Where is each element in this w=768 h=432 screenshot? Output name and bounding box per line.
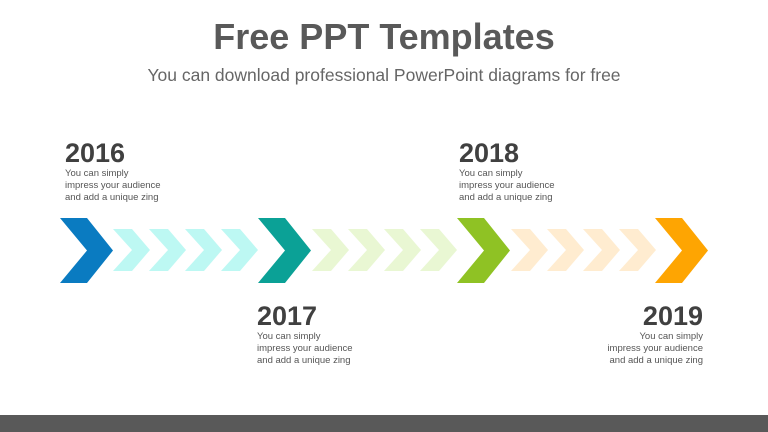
text: 2018: and add a unique zing (459, 192, 552, 203)
text: 2019: impress your audience (607, 343, 703, 354)
small chevrons light orange (511, 229, 656, 271)
subtitle: You can download professional PowerPoint diagrams for free (147, 65, 621, 85)
text: 2016 (65, 138, 161, 203)
footer bar (0, 415, 768, 432)
small chevrons light green (312, 229, 457, 271)
text: 2016: 2016 (65, 138, 125, 168)
text: 2019: and add a unique zing (610, 355, 703, 366)
text: 2017: and add a unique zing (257, 355, 350, 366)
small chevrons cyan (113, 229, 258, 271)
text: 2018 (459, 138, 555, 203)
chevron 2018 (457, 218, 510, 283)
title: Free PPT Templates (213, 16, 555, 57)
text: 2017 (257, 301, 353, 366)
text: 2019: You can simply (639, 331, 703, 342)
text: 2017: impress your audience (257, 343, 353, 354)
text: 2016: impress your audience (65, 180, 161, 191)
text: 2017: 2017 (257, 301, 317, 331)
text: 2018: impress your audience (459, 180, 555, 191)
chevron 2017 (258, 218, 311, 283)
text: 2016: You can simply (65, 168, 129, 179)
chevron 2019 (655, 218, 708, 283)
text: 2018: 2018 (459, 138, 519, 168)
text: 2019: 2019 (643, 301, 703, 331)
text: 2019 (607, 301, 703, 366)
text: 2017: You can simply (257, 331, 321, 342)
text: 2016: and add a unique zing (65, 192, 158, 203)
chevron 2016 (60, 218, 113, 283)
text: 2018: You can simply (459, 168, 523, 179)
